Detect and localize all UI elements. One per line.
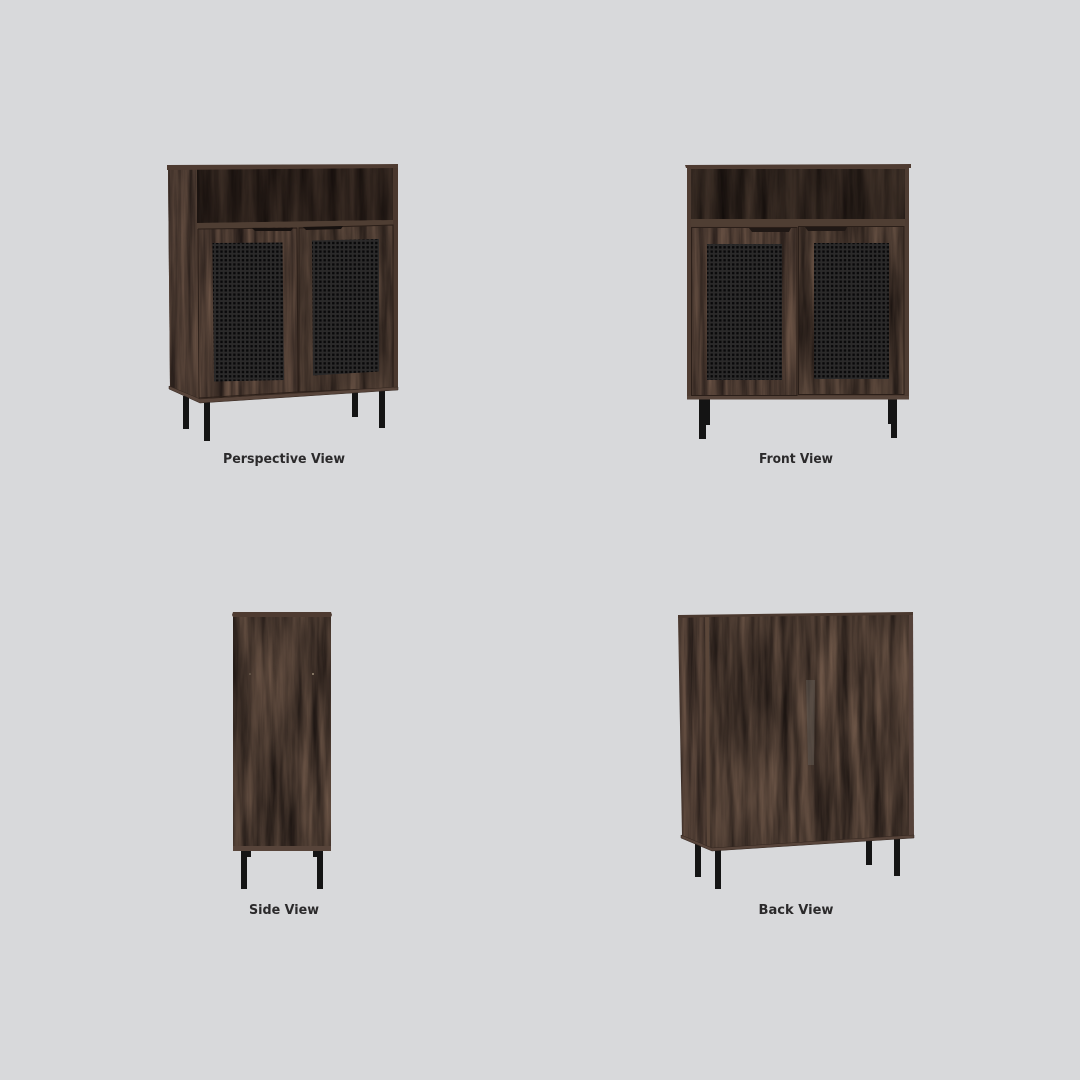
cabinet frame: [687, 167, 909, 397]
legs: [699, 398, 897, 439]
shelf front edge: [691, 219, 905, 226]
top slab: [678, 612, 913, 618]
legs: [241, 851, 323, 889]
panel: back view: [678, 612, 914, 918]
label: Perspective View: [223, 451, 345, 467]
right door: [798, 226, 904, 395]
left side panel: [678, 616, 710, 848]
legs: [695, 835, 900, 889]
panel: front view: [685, 164, 911, 467]
label: Front View: [759, 451, 833, 467]
cane mesh panels: [212, 239, 379, 382]
cabinet backing: [168, 166, 398, 400]
screw dots: [249, 673, 314, 675]
legs: [183, 388, 385, 441]
door seams: [198, 225, 393, 398]
panel: perspective view: [167, 164, 398, 467]
side wood panel: [233, 616, 331, 847]
cane mesh panels: [707, 243, 889, 380]
right door: [298, 225, 394, 393]
panel: side view: [232, 612, 332, 918]
base: [169, 386, 398, 403]
top slab: [232, 612, 332, 617]
base: [687, 396, 909, 400]
label: Back View: [758, 902, 834, 918]
left door: [198, 227, 298, 399]
open shelf niche: [691, 169, 905, 221]
door handles: [252, 226, 343, 231]
open shelf niche: [197, 167, 395, 228]
door seams: [692, 226, 904, 396]
right edge: [393, 167, 398, 388]
frame strip: [705, 616, 711, 847]
label: Side View: [249, 902, 319, 918]
left side panel: [168, 168, 199, 400]
grey centre streak: [806, 680, 815, 765]
top slab: [167, 164, 398, 170]
right edge strip: [909, 613, 914, 836]
shelf front edge: [197, 220, 394, 229]
left door: [691, 227, 798, 396]
door handles: [749, 227, 847, 232]
base: [681, 835, 914, 851]
back wood panel: [709, 614, 910, 850]
top slab: [685, 164, 911, 168]
base: [233, 846, 331, 851]
